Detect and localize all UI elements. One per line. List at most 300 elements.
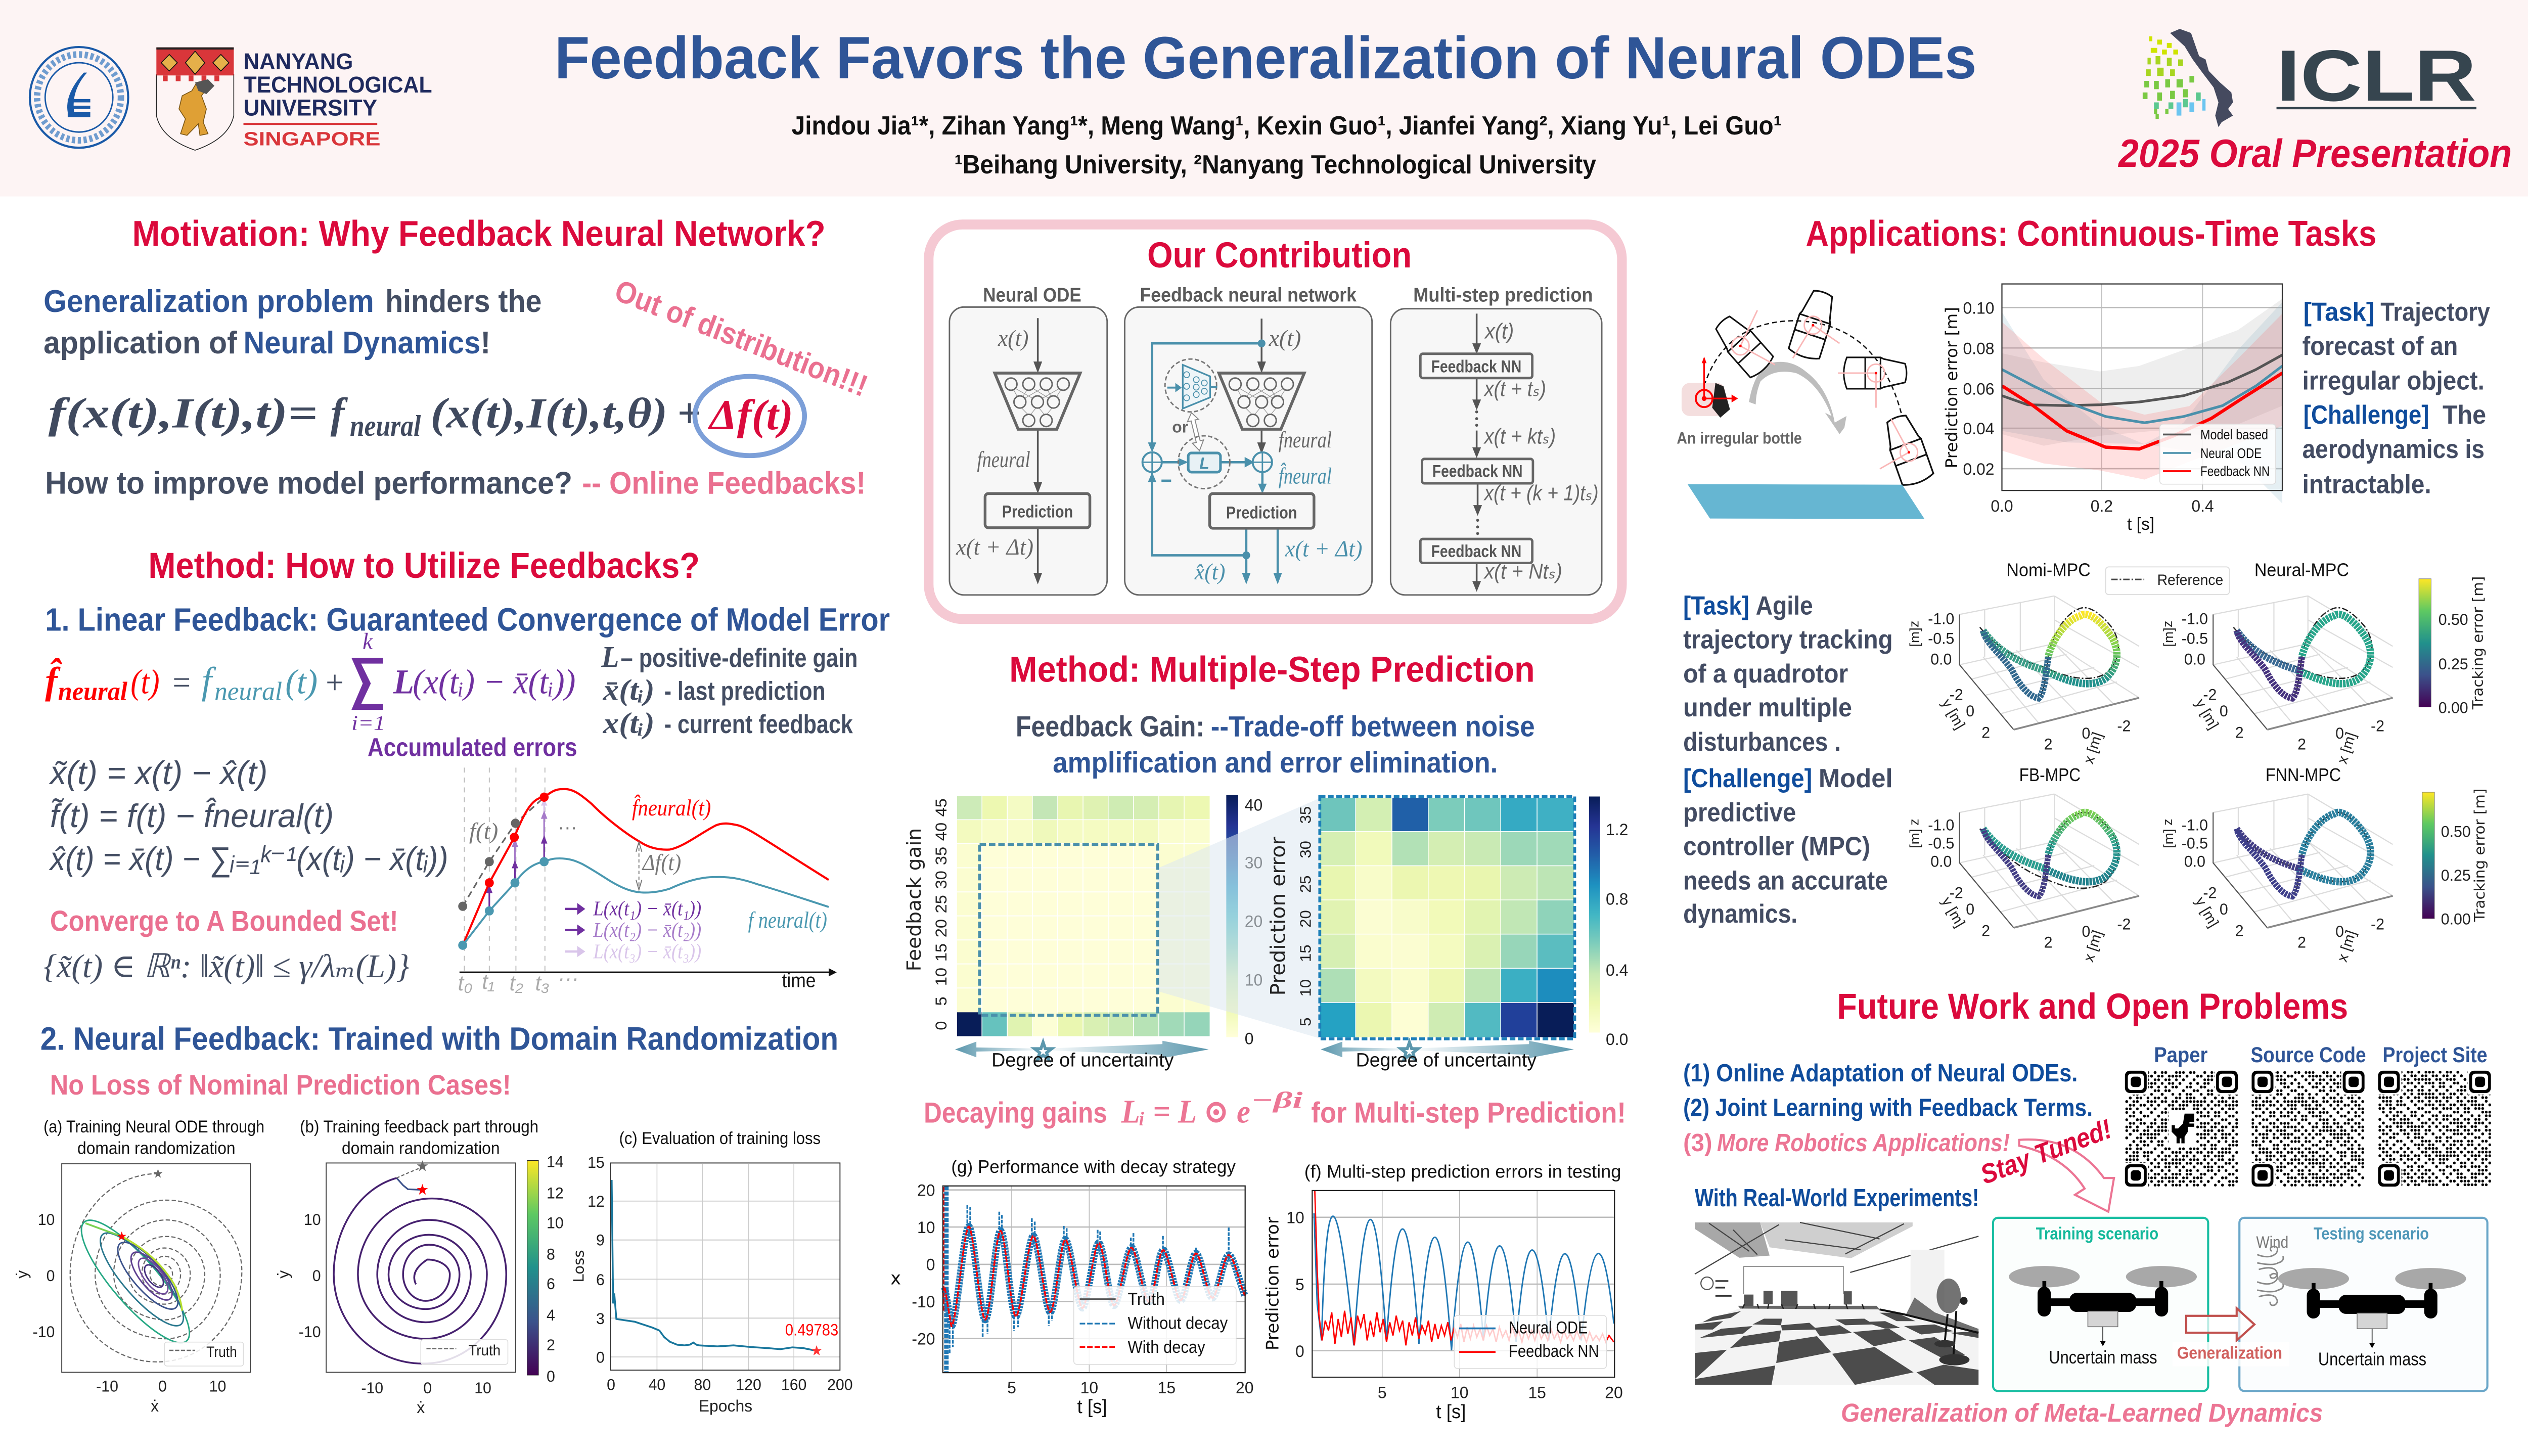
diagram: accumulated error convergence: f(t)	[469, 818, 498, 844]
chart: trajectory prediction error: 0.02	[1963, 460, 1995, 478]
chart (a): ẏ	[13, 1270, 31, 1279]
diagram: multi-step prediction: Feedback NN	[1431, 357, 1521, 376]
diagram: accumulated error convergence: t₁	[482, 969, 494, 993]
chart (c): 160	[781, 1376, 806, 1393]
text block: quadrotor task: [Task]	[1683, 590, 1749, 620]
chart (b): 14	[547, 1153, 564, 1171]
chart: Nomi-MPC	[1907, 560, 2139, 766]
chart: Nomi-MPC: 0	[2082, 725, 2090, 742]
chart: trajectory prediction error: 0.10	[1963, 299, 1995, 317]
real-world experiments label: With Real-World Experiments!	[1695, 1184, 1979, 1212]
chart (f): 5	[1295, 1275, 1304, 1294]
chart (c): 0	[607, 1376, 615, 1393]
chart (b): 8	[547, 1246, 555, 1263]
chart: trajectory prediction error: t [s]	[2127, 515, 2154, 534]
chart (f): Neural ODE	[1509, 1318, 1588, 1338]
formula: f(x(t),I(t),t)=	[49, 390, 318, 437]
panel: method feedback	[43, 545, 890, 995]
chart: full heatmap: 15	[932, 943, 950, 962]
chart: full heatmap: 30	[932, 871, 950, 889]
chart: Nomi-MPC: 0.0	[1930, 651, 1952, 668]
chart: Neural-MPC: 2	[2235, 724, 2244, 742]
chart (c): Loss	[570, 1250, 587, 1283]
equations: error definitions: x̃(t) = x(t) − x̂(t)	[49, 754, 267, 791]
chart: Neural-MPC: -0.5	[2182, 630, 2208, 648]
chart (b): 10	[547, 1214, 564, 1232]
chart (b): 10	[304, 1211, 321, 1228]
diagram: feedback neural network: L	[1199, 454, 1209, 472]
chart: zoomed heatmap: 5	[1297, 1018, 1314, 1026]
chart (g): -10	[912, 1293, 935, 1311]
chart: zoomed heatmap: 10	[1297, 979, 1314, 997]
diagram: accumulated error convergence: f̂neural(t)	[632, 795, 711, 821]
illustration: irregular bottle trajectory	[1677, 287, 1934, 519]
diagram: accumulated error convergence: time	[782, 970, 816, 992]
dashed highlight region	[979, 844, 1158, 1015]
NTU wordmark: SINGAPORE	[244, 128, 381, 149]
chart: full heatmap: 5	[932, 996, 950, 1006]
chart: Neural-MPC	[2160, 560, 2392, 766]
text block: generalization problem	[43, 283, 541, 360]
QR code: project site	[2376, 1042, 2493, 1188]
chart: trajectory prediction error: Model based	[2200, 427, 2268, 442]
chart (b): domain randomization	[342, 1139, 500, 1158]
text block: trajectory task: The	[2443, 400, 2486, 429]
diagram: multi-step prediction: x(t + tₛ)	[1483, 377, 1546, 401]
chart (c): 40	[649, 1376, 665, 1393]
chart (f): 0	[1295, 1342, 1304, 1360]
chart: full heatmap: Feedback gain	[903, 828, 926, 971]
legend text	[601, 641, 857, 740]
callout: out of distribution: Out of distribution!!!	[610, 273, 872, 403]
arrow: generalization	[2173, 1308, 2289, 1367]
chart: Nomi-MPC: 0	[1966, 703, 1974, 720]
chart: Nomi-MPC: [m]	[1907, 627, 1922, 647]
heading: Method: Multiple-Step Prediction	[1009, 650, 1535, 690]
chart: zoomed heatmap: 15	[1297, 944, 1314, 962]
chart (c): 0.49783	[785, 1321, 838, 1339]
chart: FB-MPC: z	[1908, 819, 1922, 826]
diagram: multi-step prediction: x(t + (k + 1)tₛ)	[1483, 481, 1599, 505]
diagram: neural ODE	[950, 284, 1107, 595]
chart (c): 0	[596, 1349, 605, 1367]
chart: Neural-MPC: [m]	[2160, 627, 2176, 647]
QR code: paper: Paper	[2154, 1042, 2207, 1067]
text block: generalization problem: application of	[43, 325, 237, 360]
equation: feedback form: neural	[58, 677, 128, 706]
chart: Nomi-MPC: 2	[2044, 736, 2052, 753]
chart (f): 5	[1378, 1383, 1387, 1402]
chart: trajectory prediction error: Prediction error [m]	[1943, 307, 1961, 468]
chart (c): Epochs	[699, 1396, 752, 1415]
chart: Neural-MPC: 2	[2297, 736, 2306, 753]
text block: generalization problem: !	[480, 325, 490, 360]
chart: zoomed heatmap: 0.8	[1606, 890, 1628, 908]
formula: Δf(t)	[708, 391, 793, 439]
chart: FNN-MPC: y [m]	[2192, 894, 2222, 930]
chart (f): 20	[1605, 1383, 1623, 1402]
chart: FB-MPC: FB-MPC	[2019, 765, 2081, 785]
chart (f): 10	[1286, 1208, 1304, 1227]
chart: FNN-MPC: 0	[2220, 901, 2228, 918]
formula: neural	[350, 409, 421, 442]
converge heading: Converge to A Bounded Set!	[50, 905, 398, 937]
chart: zoomed heatmap: 20	[1297, 910, 1314, 928]
chart: trajectory prediction error: 0.08	[1963, 339, 1995, 357]
colorbar: tracking error bottom: 0.50	[2441, 823, 2471, 841]
diagram: accumulated error convergence: t₃	[535, 971, 550, 995]
chart (g): -20	[912, 1330, 935, 1348]
colorbar: tracking error top: 0.00	[2439, 699, 2468, 717]
diagram: accumulated error convergence: Δf(t)	[642, 849, 681, 875]
chart: trajectory prediction error: Neural ODE	[2200, 445, 2262, 461]
chart (g): 10	[917, 1218, 935, 1237]
diagram: neural ODE: fneural	[977, 447, 1030, 472]
chart: FNN-MPC: z	[2161, 819, 2175, 826]
chart: Nomi-MPC: -1.0	[1928, 610, 1954, 627]
text block: trajectory task	[2303, 297, 2490, 499]
formula: +	[677, 390, 701, 437]
diagram: accumulated error convergence: t₀	[458, 971, 473, 995]
chart: zoomed heatmap: 0.4	[1606, 961, 1628, 979]
equations: error definitions	[49, 754, 448, 878]
chart (a)	[13, 1117, 264, 1415]
chart: full heatmap	[903, 795, 1262, 1048]
chart (g): Truth	[1128, 1290, 1165, 1309]
chart: Neural-MPC: x [m]	[2334, 730, 2359, 766]
QR code: paper	[2124, 1042, 2239, 1188]
illustration: irregular bottle trajectory: An irregular bottle	[1677, 429, 1802, 447]
text block: trajectory task: Trajectory	[2380, 297, 2490, 327]
chart: Nomi-MPC: -2	[1950, 686, 1963, 704]
chart (a): (a) Training Neural ODE through	[43, 1117, 264, 1136]
chart (a): domain randomization	[77, 1139, 236, 1158]
equation: feedback form: f	[202, 660, 216, 702]
colorbar: tracking error bottom: Tracking error [m]	[2471, 789, 2488, 922]
chart: FB-MPC: y [m]	[1938, 894, 1968, 930]
chart: full heatmap: 35	[932, 847, 950, 865]
logo: ICLR	[2143, 29, 2476, 127]
chart (c)	[570, 1129, 853, 1415]
chart: trajectory prediction error: 0.4	[2191, 497, 2214, 515]
chart: trajectory prediction error: Feedback NN	[2200, 463, 2270, 479]
decaying gains heading: Lᵢ = L ⊙ e	[1121, 1093, 1250, 1130]
chart: FB-MPC	[1907, 765, 2139, 964]
header banner	[0, 0, 2528, 197]
diagram: feedback neural network: f̂neural	[1279, 463, 1332, 489]
chart (b): 4	[547, 1307, 555, 1324]
subheading: linear feedback: 1. Linear Feedback: Guaranteed Convergence of Model Error	[45, 602, 890, 638]
chart: FNN-MPC: -0.5	[2182, 835, 2208, 852]
chart (g): 10	[1080, 1379, 1098, 1397]
chart (b): Truth	[468, 1343, 501, 1359]
scenario: training: Training scenario	[2036, 1224, 2158, 1243]
chart (g): (g) Performance with decay strategy	[951, 1157, 1236, 1177]
chart: full heatmap: 25	[932, 895, 950, 914]
chart (a): Truth	[206, 1344, 237, 1360]
chart (a): 10	[38, 1211, 55, 1228]
chart (g): Without decay	[1128, 1313, 1228, 1333]
uncertainty arrow right	[1321, 1037, 1574, 1070]
subheading: 2. Neural Feedback: Trained with Domain Randomization	[40, 1021, 838, 1057]
chart (c): 3	[596, 1310, 605, 1328]
chart (c): 120	[736, 1376, 761, 1393]
chart: zoomed heatmap: 25	[1297, 876, 1314, 893]
text block: quadrotor task: [Challenge]	[1683, 763, 1812, 793]
legend: reference	[2106, 567, 2229, 595]
chart: Neural-MPC: z	[2161, 621, 2175, 627]
title: Feedback Favors the Generalization of Neural ODEs	[555, 25, 1976, 91]
chart: FNN-MPC: 2	[2297, 934, 2306, 951]
chart (g): With decay	[1128, 1338, 1205, 1357]
uncertainty arrow left	[955, 1037, 1209, 1070]
diagram: multi-step prediction	[1390, 284, 1602, 595]
uncertainty arrow right: Degree of uncertainty	[1356, 1049, 1537, 1070]
chart (g): 0	[926, 1255, 935, 1274]
colorbar: tracking error bottom	[2422, 789, 2488, 928]
diagram: neural ODE: x(t)	[998, 326, 1028, 351]
chart (a): 0	[47, 1267, 55, 1285]
text block: generalization problem: hinders the	[385, 283, 541, 318]
accumulated errors label: Accumulated errors	[368, 733, 577, 762]
chart (b): 10	[474, 1380, 491, 1397]
heading: Future Work and Open Problems	[1837, 986, 2348, 1027]
chart: full heatmap: 30	[1245, 853, 1262, 872]
chart: Nomi-MPC: z	[1908, 621, 1922, 627]
bounded set equation: {x̃(t) ∈ ℝⁿ: ‖x̃(t)‖ ≤ γ/λₘ(L)}	[43, 947, 410, 984]
equation: feedback form: k	[363, 628, 373, 654]
text block: quadrotor task: Model	[1819, 763, 1893, 793]
diagram: feedback neural network: x(t)	[1269, 326, 1301, 351]
legend: reference: Reference	[2157, 572, 2223, 588]
legend text: - current feedback	[664, 709, 853, 739]
text block: online feedbacks	[45, 465, 866, 500]
decaying gains heading: −βi	[1251, 1087, 1303, 1113]
scenario: testing: Uncertain mass	[2318, 1349, 2426, 1370]
colorbar: tracking error bottom: 0.25	[2441, 867, 2471, 884]
diagram: feedback neural network: or	[1172, 418, 1189, 436]
chart: FNN-MPC: -2	[2203, 884, 2217, 901]
chart (b): ẋ	[417, 1398, 425, 1417]
chart (f): Prediction error	[1263, 1217, 1283, 1350]
chart (f): (f) Multi-step prediction errors in testing	[1304, 1161, 1621, 1182]
chart: full heatmap: 0	[1245, 1029, 1253, 1048]
QR code: source code: Source Code	[2251, 1042, 2366, 1067]
banner background	[0, 0, 2528, 197]
text block: trade-off: amplification and error elimination.	[1053, 747, 1498, 779]
text block: trajectory task: aerodynamics is	[2303, 434, 2485, 464]
panel: applications	[1677, 214, 2490, 964]
legend text: x̄(tᵢ)	[603, 673, 655, 707]
diagram: accumulated error convergence: ···	[558, 966, 579, 990]
equation: feedback form: (x(tᵢ) − x̄(tᵢ))	[413, 663, 575, 701]
chart (b): -10	[361, 1380, 383, 1397]
chart (f)	[1263, 1161, 1623, 1422]
chart: full heatmap: 20	[932, 919, 950, 937]
colorbar: tracking error top	[2419, 576, 2487, 717]
chart: FB-MPC: -2	[1950, 884, 1963, 901]
text block: quadrotor task: Agile	[1756, 590, 1813, 620]
chart (f): 10	[1451, 1383, 1469, 1402]
chart: zoomed heatmap: Prediction error	[1267, 837, 1290, 995]
text block: trajectory task: forecast of an	[2303, 331, 2458, 360]
text block: trajectory task: intractable.	[2303, 469, 2431, 499]
equation: feedback form: i=1	[351, 711, 385, 734]
decaying gains heading	[924, 1087, 1626, 1130]
chart: FB-MPC: 0	[2082, 923, 2090, 940]
chart: Nomi-MPC: -0.5	[1928, 630, 1954, 648]
chart: FB-MPC: -1.0	[1928, 816, 1954, 834]
text block: quadrotor task	[1683, 590, 1893, 928]
diagram: multi-step prediction: Multi-step prediction	[1413, 284, 1593, 306]
chart: full heatmap: 40	[932, 823, 950, 841]
formula	[49, 376, 804, 456]
chart: FNN-MPC: [m]	[2160, 829, 2176, 848]
chart: Neural-MPC: Neural-MPC	[2254, 560, 2349, 580]
legend text: L	[601, 641, 619, 673]
chart (g): t [s]	[1077, 1396, 1107, 1417]
equations: error definitions: f̃(t) = f(t) − f̂neural(t)	[50, 797, 334, 834]
diagram: neural ODE: Prediction	[1002, 502, 1073, 522]
chart (b): -10	[299, 1324, 321, 1341]
equation: feedback form: L	[393, 663, 414, 701]
NTU wordmark: UNIVERSITY	[244, 95, 377, 121]
diagram: accumulated error convergence: t₂	[510, 971, 523, 995]
chart: FNN-MPC	[2160, 765, 2392, 964]
chart (b): 12	[547, 1185, 564, 1202]
diagram: multi-step prediction: Feedback NN	[1432, 462, 1522, 481]
scenario: training: Uncertain mass	[2049, 1347, 2157, 1368]
heading: Applications: Continuous-Time Tasks	[1805, 214, 2376, 254]
text block: quadrotor task: under multiple	[1683, 692, 1852, 722]
text block: quadrotor task: of a quadrotor	[1683, 658, 1848, 688]
diagram: accumulated error convergence	[458, 767, 837, 995]
chart (f): 15	[1528, 1383, 1546, 1402]
scenario: testing	[2239, 1218, 2488, 1391]
uncertainty arrow left: Degree of uncertainty	[991, 1049, 1174, 1070]
chart (c): (c) Evaluation of training loss	[619, 1129, 821, 1148]
chart (b): 2	[547, 1337, 555, 1354]
colorbar: tracking error top: Tracking error [m]	[2469, 576, 2487, 710]
formula: (x(t),I(t),t,θ)	[430, 390, 667, 437]
chart (g): x	[890, 1268, 901, 1289]
chart: FNN-MPC: -2	[2371, 916, 2384, 933]
chart (c): 6	[596, 1271, 605, 1289]
diagram: accumulated error convergence: ···	[558, 816, 577, 838]
chart (g)	[890, 1157, 1253, 1417]
text block: quadrotor task: controller (MPC)	[1683, 831, 1870, 861]
chart: zoomed heatmap: 35	[1297, 806, 1314, 824]
callout: stay tuned: Stay Tuned!	[1976, 1114, 2115, 1190]
text block: online feedbacks: How to improve model performance?	[45, 465, 572, 500]
chart: Nomi-MPC: x [m]	[2081, 730, 2106, 766]
contribution frame	[929, 224, 1622, 619]
chart: FNN-MPC: x [m]	[2334, 928, 2359, 964]
authors: Jindou Jia¹*, Zihan Yang¹*, Meng Wang¹, Kexin Guo¹, Jianfei Yang², Xiang Yu¹, Lei Guo¹	[792, 111, 1782, 140]
chart (c): 9	[596, 1232, 605, 1249]
text block: trajectory task: irregular object.	[2303, 366, 2485, 395]
diagram: feedback neural network: Feedback neural network	[1140, 284, 1357, 306]
equation: feedback form: =	[172, 664, 191, 701]
legend text: - last prediction	[664, 676, 826, 706]
chart: trajectory prediction error: 0.0	[1991, 497, 2013, 515]
panel: future work	[1683, 986, 2493, 1427]
text block: trajectory task: [Challenge]	[2304, 400, 2429, 429]
affiliations: ¹Beihang University, ²Nanyang Technological University	[955, 149, 1596, 179]
NTU wordmark: TECHNOLOGICAL	[244, 71, 432, 98]
chart: FB-MPC: 2	[1981, 922, 1990, 940]
list of future work: More Robotics Applications!	[1717, 1129, 2010, 1157]
text block: online feedbacks: -- Online Feedbacks!	[582, 465, 866, 500]
chart: Neural-MPC: -1.0	[2182, 610, 2208, 627]
legend text: x(tᵢ)	[603, 706, 655, 740]
text block: quadrotor task: trajectory tracking	[1683, 624, 1893, 654]
chart (c): 12	[588, 1193, 605, 1210]
zoom projection overlay	[1158, 798, 1320, 1038]
chart: full heatmap: 45	[932, 798, 950, 817]
diagram: feedback neural network: Prediction	[1226, 503, 1297, 522]
text block: quadrotor task: disturbances .	[1683, 727, 1841, 756]
chart: full heatmap: 40	[1245, 796, 1262, 814]
chart (g): 5	[1007, 1379, 1016, 1397]
diagram: multi-step prediction: x(t + Ntₛ)	[1483, 559, 1562, 583]
panel: multiple-step method	[890, 650, 1628, 1422]
text block: quadrotor task: predictive	[1683, 797, 1796, 827]
list of future work: (2) Joint Learning with Feedback Terms.	[1683, 1094, 2093, 1121]
QR code: project site: Project Site	[2382, 1042, 2488, 1067]
logo: NTU shield	[156, 48, 234, 150]
chart: Nomi-MPC: 2	[1981, 724, 1990, 742]
chart: FNN-MPC: 0.0	[2184, 853, 2205, 870]
chart: trajectory prediction error: 0.2	[2091, 497, 2113, 515]
colorbar: tracking error top: 0.25	[2439, 656, 2468, 673]
text block: generalization problem: Neural Dynamics	[244, 325, 480, 360]
chart (b): 0	[423, 1380, 432, 1397]
photo: flight arena	[1695, 1222, 1978, 1385]
chart: Nomi-MPC: Nomi-MPC	[2006, 560, 2091, 580]
NTU wordmark: NANYANG	[244, 49, 353, 74]
chart (a): -10	[33, 1324, 55, 1341]
list of future work: (1) Online Adaptation of Neural ODEs.	[1683, 1059, 2078, 1087]
chart (f): t [s]	[1436, 1400, 1466, 1422]
diagram: multi-step prediction: x(t + ktₛ)	[1483, 424, 1556, 448]
panel: neural feedback	[13, 1021, 853, 1417]
chart: Neural-MPC: 0.0	[2184, 651, 2205, 668]
NTU wordmark	[244, 49, 432, 149]
text block: trade-off: --Trade-off between noise	[1211, 710, 1535, 742]
chart (g): 20	[1236, 1379, 1253, 1397]
scenario: testing: Wind	[2256, 1233, 2288, 1251]
callout: stay tuned	[1976, 1114, 2115, 1212]
chart: Neural-MPC: y [m]	[2192, 696, 2222, 732]
chart (c): 15	[588, 1154, 605, 1171]
equation: feedback form: neural	[214, 677, 282, 706]
heading: Method: How to Utilize Feedbacks?	[148, 545, 700, 586]
text block: trade-off: Feedback Gain:	[1016, 710, 1204, 742]
diagram: accumulated error convergence: f neural(t)	[748, 907, 827, 933]
chart: full heatmap: 10	[932, 968, 950, 986]
chart: full heatmap: 20	[1245, 912, 1262, 931]
decaying gains heading: for Multi-step Prediction!	[1311, 1097, 1626, 1129]
diagram: accumulated error convergence: L(x(t₂) − x̄(t₂))	[593, 919, 701, 941]
oral presentation label: 2025 Oral Presentation	[2117, 131, 2512, 175]
chart: FB-MPC: -2	[2117, 916, 2131, 933]
chart: Nomi-MPC: y [m]	[1938, 696, 1968, 732]
chart (b): 0	[312, 1267, 321, 1285]
diagram: feedback neural network: fneural	[1279, 427, 1332, 452]
diagram: accumulated error convergence: L(x(t₁) − x̄(t₁))	[593, 897, 701, 920]
chart: zoomed heatmap: 1.2	[1606, 821, 1628, 839]
